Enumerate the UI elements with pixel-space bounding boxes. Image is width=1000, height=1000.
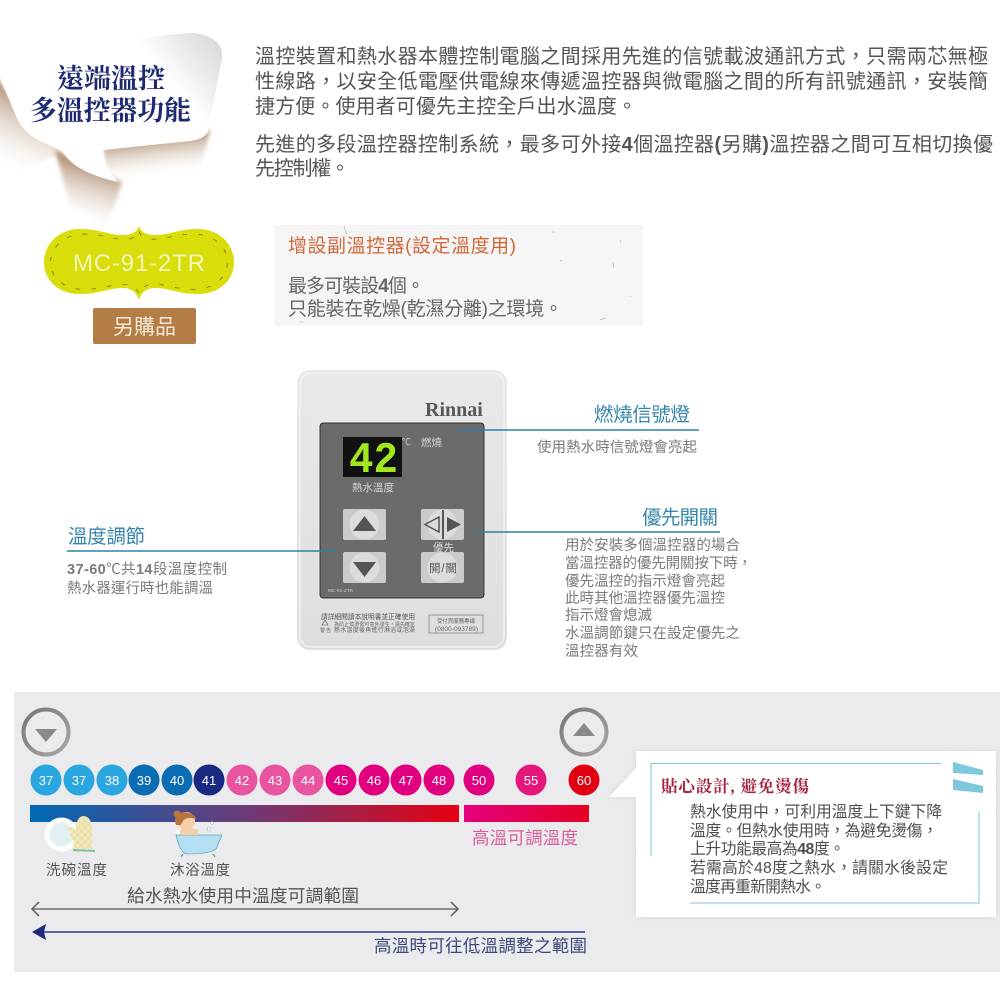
callout: priority switch: 用於安裝多個溫控器的場合	[565, 536, 740, 554]
device: remote controller: 優先	[433, 541, 454, 554]
temperature scale circles: 37	[72, 773, 86, 788]
button: down	[343, 552, 386, 583]
panel heading: 增設副溫控器(設定溫度用)	[288, 235, 516, 257]
callout: priority switch: 當溫控器的優先開關按下時，	[565, 555, 752, 572]
button: priority	[421, 509, 464, 540]
device: remote controller: ℃	[402, 437, 411, 447]
temperature scale circles	[30, 764, 600, 796]
callout: priority switch: 指示燈會熄滅	[565, 607, 652, 624]
temperature scale circles: 48	[432, 773, 446, 788]
temperature scale circles: 42	[235, 773, 249, 788]
icon: stripes	[953, 762, 983, 793]
callout: priority switch: 溫控器有效	[565, 643, 638, 660]
callout: burn indicator: 燃燒信號燈	[594, 404, 690, 426]
brand: Rinnai	[425, 399, 483, 421]
panel text	[288, 275, 563, 320]
callout: priority switch	[477, 507, 752, 660]
button: power	[421, 552, 464, 583]
label: lowering range: 高溫時可往低溫調整之範圍	[374, 936, 587, 956]
button: up	[343, 509, 386, 540]
icon: bath	[174, 810, 222, 857]
label: high temperature: 高溫可調溫度	[472, 828, 578, 848]
title	[30, 64, 191, 126]
temperature scale circles: 40	[170, 773, 184, 788]
temperature scale circles: 60	[577, 773, 591, 788]
device notices: 警告	[320, 627, 331, 634]
panel text: 最多可裝設4個。	[288, 275, 425, 297]
temperature scale circles: 37	[39, 773, 53, 788]
temperature scale circles: 44	[301, 773, 315, 788]
icon: down button	[24, 710, 68, 754]
callout: burn indicator: 使用熱水時信號燈會亮起	[537, 438, 698, 456]
speech bubble heading	[0, 33, 222, 226]
device notices: (0800-093789)	[435, 626, 478, 633]
callout: temperature adjust: 熱水器運行時也能調溫	[67, 580, 213, 597]
callout: temperature adjust	[67, 526, 335, 597]
callout: caring design	[609, 751, 996, 917]
control panel	[320, 423, 484, 598]
label: dish temperature: 洗碗溫度	[46, 862, 107, 879]
label: bath temperature: 沐浴溫度	[170, 862, 230, 879]
intro paragraph 1: 捷方便。使用者可優先主控全戶出水溫度。	[255, 95, 637, 118]
intro paragraph 2: 先控制權。	[255, 157, 350, 180]
intro paragraph 2	[255, 133, 993, 180]
temperature scale circles: 55	[524, 773, 538, 788]
button: power: 開/關	[429, 562, 457, 575]
icon: up button	[562, 710, 606, 754]
device notices	[320, 612, 483, 634]
icon: dish and mitt	[47, 816, 95, 851]
panel: sub controller	[274, 225, 643, 326]
temperature scale circles: 45	[334, 773, 348, 788]
device: remote controller: 燃燒	[421, 436, 442, 449]
panel: temperature range	[14, 692, 1000, 972]
title: 遠端溫控	[57, 64, 165, 94]
callout: priority switch: 優先開關	[642, 507, 718, 529]
panel text: 只能裝在乾燥(乾濕分離)之環境。	[288, 298, 563, 320]
arrow: adjustable range	[32, 902, 458, 916]
model badge	[44, 226, 234, 300]
gradient bar: normal range	[30, 805, 459, 822]
title: 多溫控器功能	[30, 96, 191, 126]
intro paragraph 2: 先進的多段溫控器控制系統，最多可外接4個溫控器(另購)溫控器之間可互相切換優	[255, 133, 993, 156]
callout: temperature adjust: 溫度調節	[68, 526, 145, 548]
device notices: 為防止燒燙傷可意外發生，請先確定	[334, 621, 415, 628]
intro paragraph 1	[255, 45, 988, 118]
temperature scale circles: 46	[367, 773, 381, 788]
model badge: MC-91-2TR	[73, 250, 205, 277]
temperature scale circles: 47	[399, 773, 413, 788]
optional purchase label: 另購品	[113, 316, 176, 339]
temperature scale circles: 38	[105, 773, 119, 788]
device notices: 熱水溫度後再進行淋浴或泡澡	[334, 626, 415, 634]
device notices: 請詳細閱讀本說明書並正確使用	[321, 612, 415, 621]
device: remote controller: 熱水溫度	[352, 481, 394, 494]
callout text: 溫度再重新開熱水。	[690, 878, 826, 896]
callout text: 若需高於48度之熱水，請關水後設定	[690, 859, 948, 877]
temperature display: 42	[349, 436, 398, 486]
callout text: 熱水使用中，可利用溫度上下鍵下降	[690, 803, 942, 821]
callout text	[690, 803, 948, 896]
temperature scale circles: 50	[472, 773, 486, 788]
device notices: 受付齊服務專線	[437, 617, 476, 625]
arrow: downward range	[32, 924, 585, 940]
intro paragraph 1: 溫控裝置和熱水器本體控制電腦之間採用先進的信號載波通訊方式，只需兩芯無極	[255, 45, 988, 68]
device: remote controller	[297, 370, 507, 650]
callout: priority switch: 優先溫控的指示燈會亮起	[565, 572, 726, 590]
callout: burn indicator	[458, 404, 699, 456]
optional purchase label	[93, 308, 196, 344]
temperature scale circles: 41	[202, 773, 216, 788]
temperature scale circles: 43	[268, 773, 282, 788]
callout: priority switch: 此時其他溫控器優先溫控	[565, 590, 725, 607]
callout text: 上升功能最高為48度。	[690, 840, 845, 858]
callout: priority switch: 水溫調節鍵只在設定優先之	[565, 624, 740, 642]
device: remote controller: MC-91-2TR	[328, 588, 354, 593]
temperature scale circles: 39	[137, 773, 151, 788]
label: adjustable range: 給水熱水使用中溫度可調範圍	[127, 886, 359, 906]
intro paragraph 1: 性線路，以安全低電壓供電線來傳遞溫控器與微電腦之間的所有訊號通訊，安裝簡	[255, 70, 988, 93]
gradient bar: high range	[464, 805, 589, 822]
callout heading: 貼心設計, 避免燙傷	[661, 776, 810, 796]
callout: temperature adjust: 37-60℃共14段溫度控制	[67, 561, 227, 578]
callout text: 溫度。但熱水使用時，為避免燙傷，	[690, 822, 938, 840]
